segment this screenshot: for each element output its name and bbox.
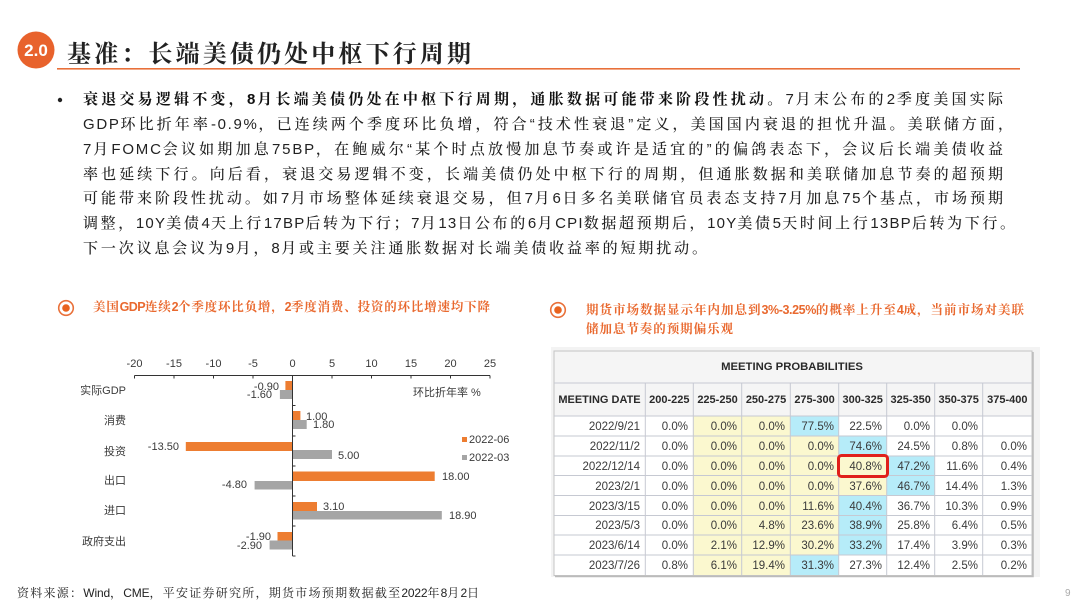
- axis unit note: 环比折年率 %: [413, 385, 481, 399]
- row 2023/7/26: 27.3%: [849, 560, 882, 572]
- table header row: 225-250: [697, 394, 738, 406]
- section number badge: 2.0: [24, 41, 48, 60]
- top axis with tick labels: 15: [405, 358, 417, 370]
- row 2023/6/14: 2023/6/14: [589, 540, 641, 552]
- row 2022/12/14: 2022/12/14: [582, 461, 641, 473]
- row 2022/11/2: 0.0%: [759, 441, 785, 453]
- vertical zero axis: [292, 375, 296, 556]
- table header row: 200-225: [649, 394, 689, 406]
- row 2023/3/15: [589, 501, 1027, 513]
- row 2022/12/14: 0.4%: [1001, 461, 1027, 473]
- row 2023/7/26: 0.8%: [662, 560, 688, 572]
- bars: 2022-03: [255, 390, 442, 550]
- right table heading: 储加息节奏的预期偏乐观: [586, 321, 733, 336]
- table header row: MEETING DATE: [558, 394, 641, 406]
- table header row: 375-400: [987, 394, 1027, 406]
- row 2023/3/15: 0.9%: [1001, 501, 1027, 513]
- row 2023/5/3: 0.0%: [711, 520, 737, 532]
- bar chart: US GDP components: [80, 358, 509, 556]
- category labels: 消费: [104, 413, 126, 427]
- row 2023/5/3: [595, 520, 1027, 532]
- row 2022/11/2: 0.8%: [952, 441, 978, 453]
- body text block: 调整，10Y美债4天上行17BP后转为下行；7月13日公布的6月CPI数据超预期后，10Y美债5天时间上行13BP后转为下行。: [83, 214, 1015, 232]
- row 2022/12/14: [582, 461, 1027, 473]
- row 2023/5/3: 6.4%: [952, 520, 978, 532]
- row 2023/2/1: 0.0%: [662, 481, 688, 493]
- row 2022/12/14: 40.8%: [849, 461, 882, 473]
- row 2023/2/1: 0.0%: [759, 481, 785, 493]
- table header row: [558, 394, 1027, 406]
- table header row: 275-300: [794, 394, 835, 406]
- row 2022/11/2: [590, 441, 1027, 453]
- category labels: 进口: [104, 504, 126, 517]
- row 2022/12/14: 11.6%: [946, 461, 978, 473]
- table title: MEETING PROBABILITIES: [721, 361, 863, 373]
- right table heading: 期货市场数据显示年内加息到3%-3.25%的概率上升至4成，当前市场对美联: [586, 302, 1024, 317]
- legend: [462, 434, 509, 464]
- row 2022/11/2: 24.5%: [897, 441, 930, 453]
- row 2023/7/26: [589, 560, 1027, 572]
- data labels: -13.50: [148, 441, 179, 453]
- row 2023/6/14: 33.2%: [849, 540, 882, 552]
- body text block: 7月FOMC会议如期加息75BP，在鲍威尔“某个时点放慢加息节奏或许是适宜的”的偏鸽表态下，会议后长端美债收益: [83, 140, 1003, 158]
- row 2022/12/14: 47.2%: [897, 461, 930, 473]
- table header row: 300-325: [843, 394, 883, 406]
- category labels: 实际GDP: [80, 383, 126, 397]
- page number: 9: [1065, 588, 1071, 599]
- category labels: 投资: [104, 444, 126, 458]
- row 2022/9/21: 2022/9/21: [589, 421, 640, 433]
- top axis with tick labels: 25: [484, 358, 496, 370]
- category labels: [80, 383, 126, 548]
- cell highlights: [693, 416, 935, 575]
- data labels: -4.80: [222, 479, 247, 491]
- table: meeting probabilities: [551, 347, 1040, 577]
- top axis with tick labels: 20: [444, 358, 457, 370]
- row 2023/3/15: 36.7%: [897, 501, 930, 513]
- row 2023/6/14: 17.4%: [897, 540, 930, 552]
- section number badge: [18, 32, 54, 68]
- data labels: 18.00: [442, 471, 470, 483]
- row 2023/2/1: 1.3%: [1001, 481, 1027, 493]
- table background: [551, 347, 1040, 577]
- row 2022/9/21: 0.0%: [952, 421, 978, 433]
- source footnote: 资料来源：Wind，CME，平安证券研究所，期货市场预期数据截至2022年8月2日: [17, 585, 479, 600]
- row 2022/11/2: 0.0%: [711, 441, 737, 453]
- data labels: 5.00: [338, 450, 359, 462]
- row 2023/6/14: 0.3%: [1001, 540, 1027, 552]
- row 2023/7/26: 2.5%: [952, 560, 978, 572]
- top axis with tick labels: -15: [166, 358, 182, 370]
- bullet: [58, 98, 62, 102]
- row 2022/9/21: 0.0%: [904, 421, 930, 433]
- data labels: 18.90: [449, 510, 477, 522]
- row 2023/5/3: 0.0%: [662, 520, 688, 532]
- row 2022/9/21: 0.0%: [711, 421, 737, 433]
- row 2023/7/26: 31.3%: [801, 560, 834, 572]
- row 2022/12/14: 0.0%: [808, 461, 834, 473]
- row 2023/6/14: 2.1%: [711, 540, 737, 552]
- row 2023/7/26: 2023/7/26: [589, 560, 640, 572]
- row 2023/6/14: 0.0%: [662, 540, 688, 552]
- top axis with tick labels: -10: [206, 358, 221, 370]
- top axis with tick labels: 10: [365, 358, 378, 370]
- table header row: 325-350: [891, 394, 931, 406]
- data labels: -1.60: [247, 389, 272, 401]
- row 2023/3/15: 40.4%: [849, 501, 882, 513]
- row 2023/7/26: 0.2%: [1001, 560, 1027, 572]
- title underline: [57, 68, 1020, 70]
- body text block: GDP环比折年率-0.9%，已连续两个季度环比负增，符合“技术性衰退”定义，美国国内衰退的担忧升温。美联储方面，: [83, 115, 1013, 133]
- category labels: 出口: [104, 473, 126, 487]
- row 2022/9/21: 0.0%: [662, 421, 688, 433]
- row 2023/7/26: 6.1%: [711, 560, 737, 572]
- category labels: 政府支出: [82, 534, 126, 548]
- row 2022/9/21: 77.5%: [801, 421, 834, 433]
- row 2022/12/14: 0.0%: [759, 461, 785, 473]
- row 2023/2/1: 2023/2/1: [595, 481, 640, 493]
- top axis with tick labels: 0: [289, 358, 296, 370]
- row 2023/5/3: 4.8%: [759, 520, 785, 532]
- row 2022/11/2: 0.0%: [808, 441, 834, 453]
- icon: right table target bullet: [551, 303, 565, 317]
- row 2023/3/15: 10.3%: [945, 501, 978, 513]
- top axis with tick labels: -20: [127, 358, 142, 370]
- row 2022/11/2: 0.0%: [662, 441, 688, 453]
- table header row: 250-275: [746, 394, 786, 406]
- row 2023/5/3: 0.5%: [1001, 520, 1027, 532]
- body text block: 率也延续下行。向后看，衰退交易逻辑不变，长端美债仍处中枢下行的周期，但通胀数据和美联储加息节奏的超预期: [83, 165, 1003, 183]
- row 2022/11/2: 0.0%: [1001, 441, 1027, 453]
- title: 基准：长端美债仍处中枢下行周期: [67, 40, 471, 68]
- row 2022/9/21: 0.0%: [759, 421, 785, 433]
- row 2023/5/3: 2023/5/3: [595, 520, 640, 532]
- row 2023/5/3: 38.9%: [849, 520, 882, 532]
- row 2023/3/15: 11.6%: [802, 501, 834, 513]
- body text block: 可能带来阶段性扰动。如7月市场整体延续衰退交易，但7月6日多名美联储官员表态支持7月加息75个基点，市场预期: [83, 189, 1003, 207]
- row 2022/12/14: 0.0%: [662, 461, 688, 473]
- row 2023/2/1: 37.6%: [849, 481, 882, 493]
- data labels: -2.90: [237, 540, 262, 552]
- legend: 2022-06: [469, 434, 509, 446]
- body text block: 衰退交易逻辑不变，8月长端美债仍处在中枢下行周期，通胀数据可能带来阶段性扰动。7月末公布的2季度美国实际: [83, 90, 1004, 109]
- data labels: [148, 381, 477, 552]
- body text block: [83, 90, 1015, 257]
- row 2023/7/26: 12.4%: [897, 560, 930, 572]
- row 2023/6/14: 30.2%: [801, 540, 834, 552]
- right table heading: [586, 302, 1024, 336]
- row 2023/3/15: 2023/3/15: [589, 501, 640, 513]
- data labels: 1.00: [306, 411, 327, 423]
- row 2023/2/1: [595, 481, 1027, 493]
- row 2022/11/2: 2022/11/2: [590, 441, 640, 453]
- row 2022/9/21: [589, 421, 978, 433]
- data labels: 1.80: [313, 419, 334, 431]
- row 2023/6/14: [589, 540, 1027, 552]
- row 2022/12/14: 0.0%: [711, 461, 737, 473]
- top axis with tick labels: 5: [329, 358, 335, 370]
- row 2022/11/2: 74.6%: [849, 441, 882, 453]
- row 2023/3/15: 0.0%: [662, 501, 688, 513]
- row 2023/6/14: 3.9%: [952, 540, 978, 552]
- row 2023/2/1: 0.0%: [808, 481, 834, 493]
- row 2023/5/3: 25.8%: [897, 520, 930, 532]
- data labels: -1.90: [246, 531, 271, 543]
- bars: 2022-06: [186, 381, 435, 540]
- row 2023/5/3: 23.6%: [801, 520, 834, 532]
- row 2023/3/15: 0.0%: [711, 501, 737, 513]
- row 2023/6/14: 12.9%: [752, 540, 785, 552]
- row 2023/2/1: 46.7%: [897, 481, 930, 493]
- row 2023/7/26: 19.4%: [752, 560, 785, 572]
- red highlight box on 40.8%: [838, 456, 888, 476]
- top axis with tick labels: [127, 358, 496, 378]
- table header row: 350-375: [939, 394, 979, 406]
- data labels: -0.90: [254, 381, 279, 393]
- data labels: 3.10: [323, 501, 344, 513]
- row 2023/3/15: 0.0%: [759, 501, 785, 513]
- legend: 2022-03: [469, 452, 509, 464]
- body text block: 下一次议息会议为9月，8月或主要关注通胀数据对长端美债收益率的短期扰动。: [83, 239, 707, 257]
- left chart heading: 美国GDP连续2个季度环比负增，2季度消费、投资的环比增速均下降: [93, 299, 490, 314]
- top axis with tick labels: -5: [248, 358, 258, 370]
- row 2023/2/1: 0.0%: [711, 481, 737, 493]
- row 2023/2/1: 14.4%: [945, 481, 978, 493]
- row 2022/9/21: 22.5%: [849, 421, 882, 433]
- icon: left chart target bullet: [59, 301, 73, 315]
